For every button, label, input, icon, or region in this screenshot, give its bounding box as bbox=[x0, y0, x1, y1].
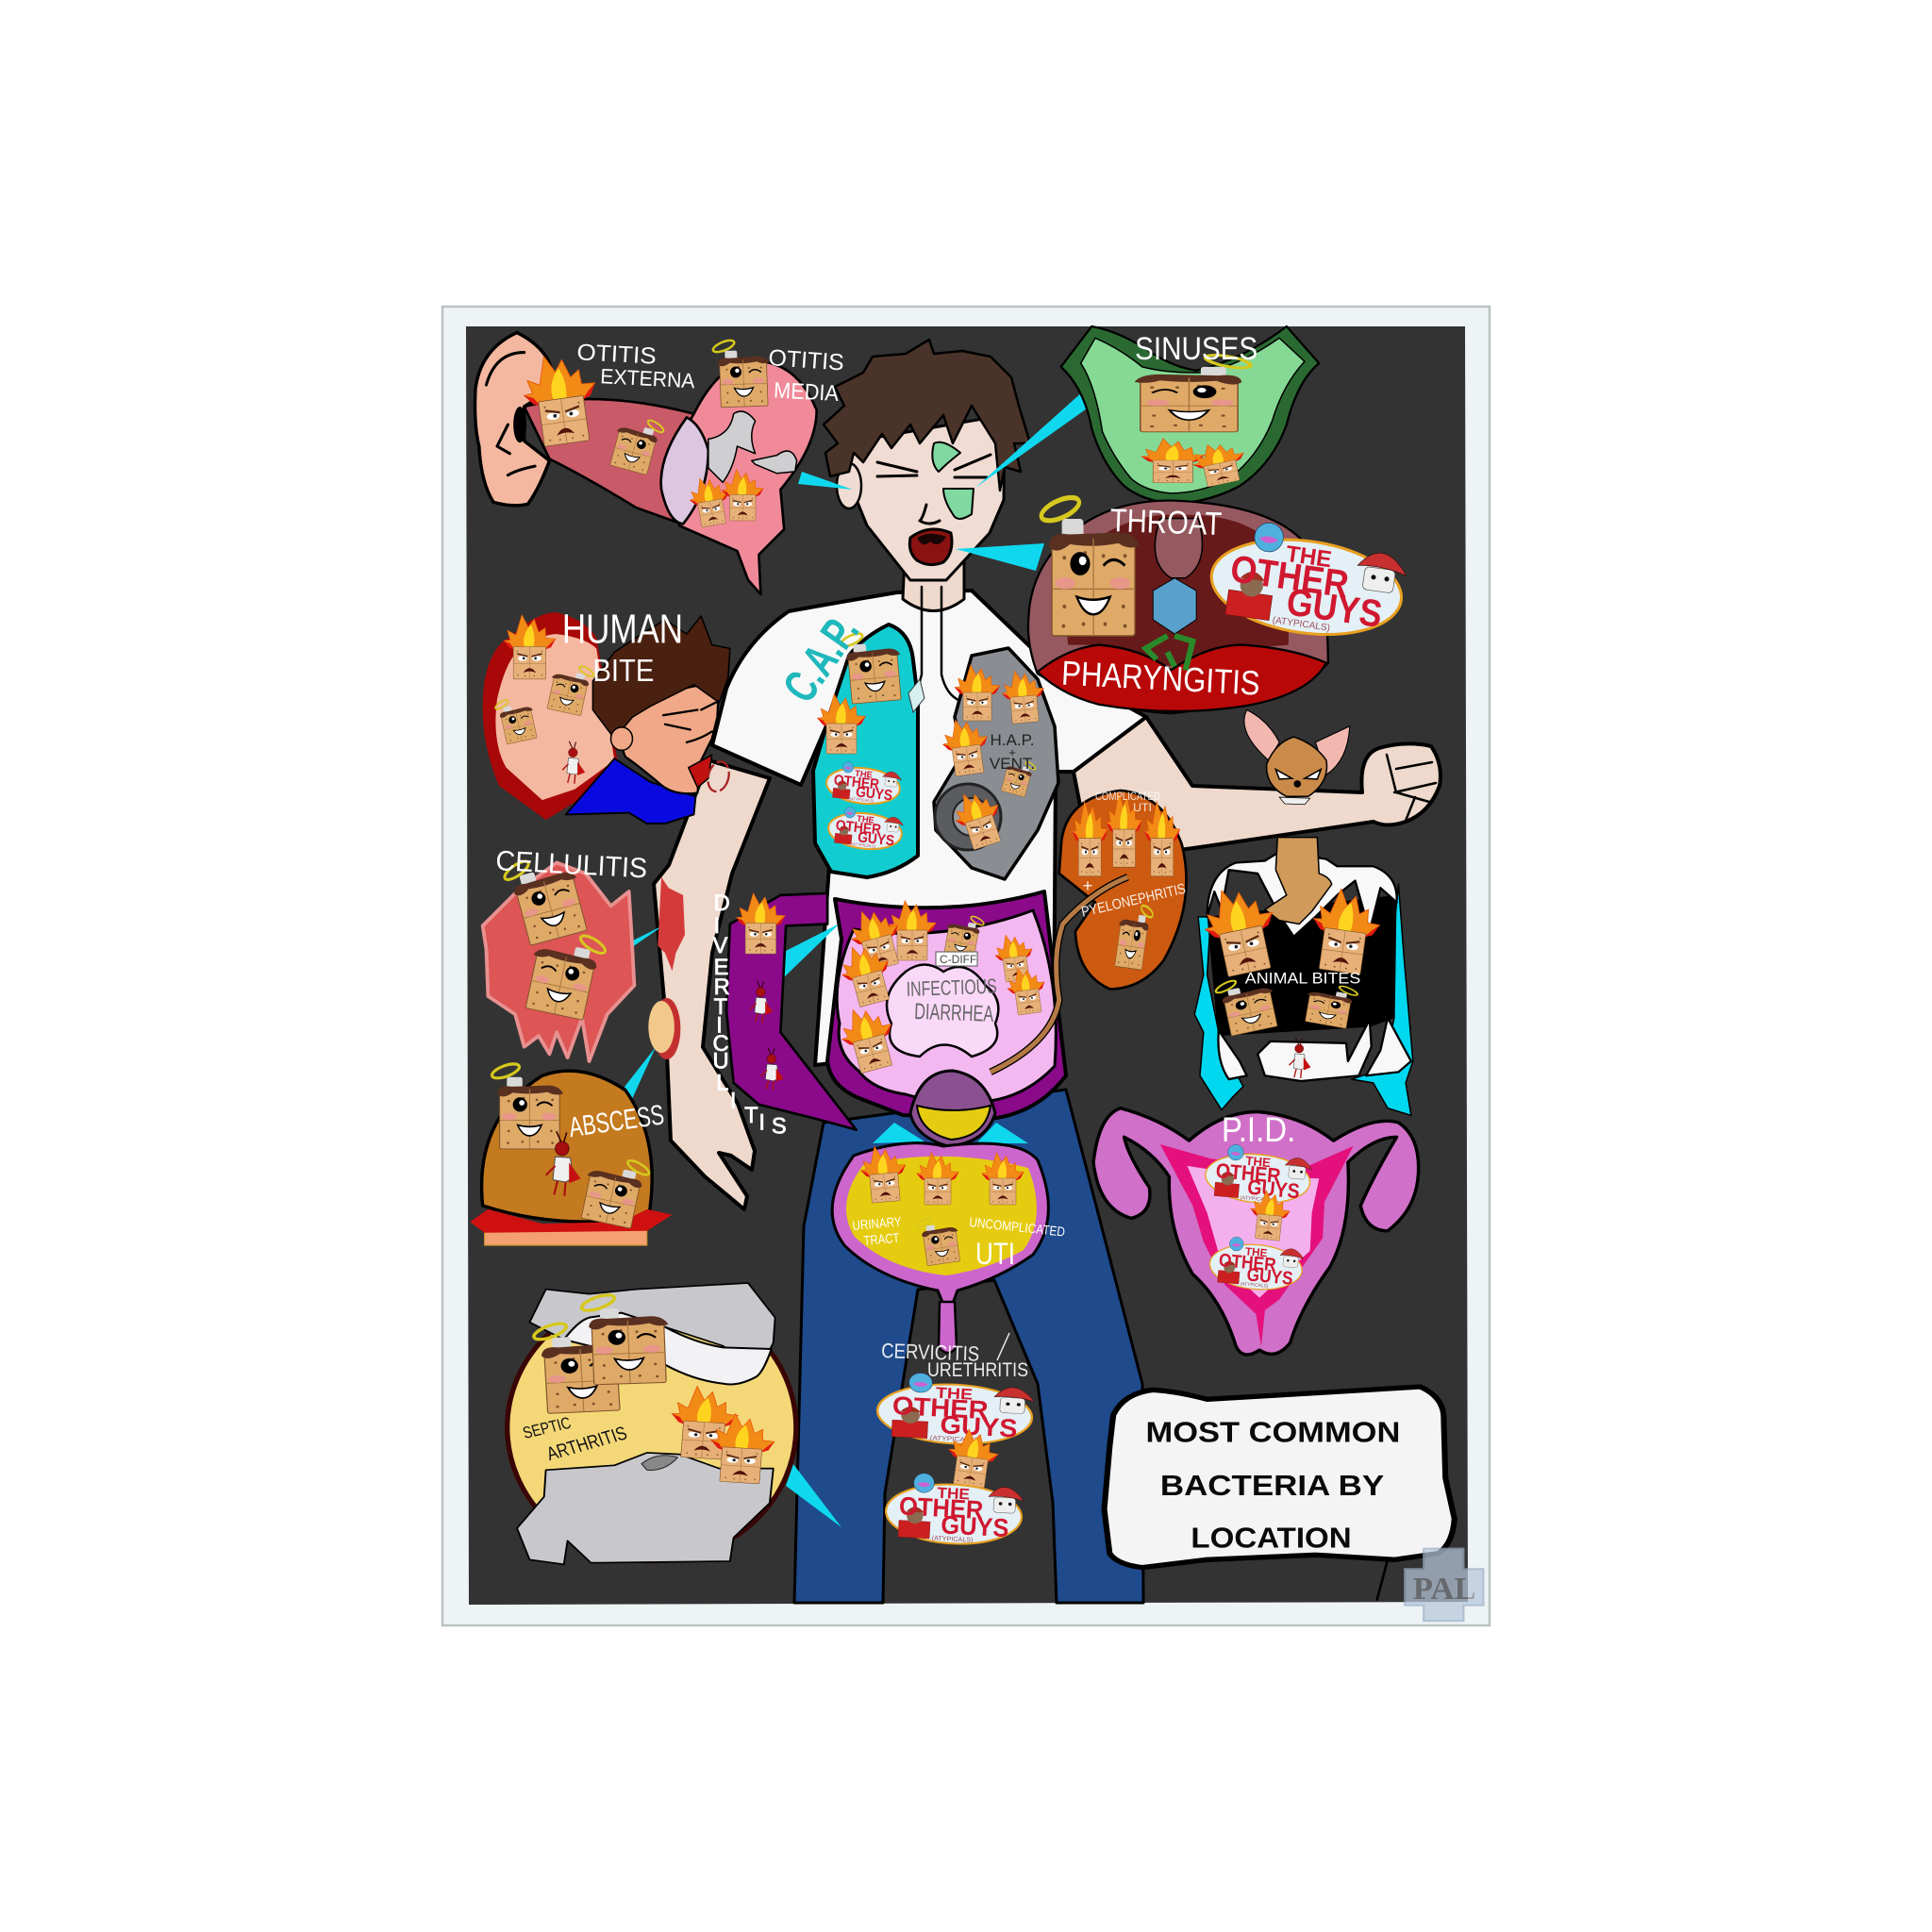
cracker bbox=[916, 1213, 962, 1267]
title text: MOST COMMON bbox=[1146, 1415, 1400, 1448]
label: UTI: UTI bbox=[975, 1237, 1015, 1271]
sinus outline bbox=[1061, 326, 1319, 504]
lung bbox=[813, 625, 918, 877]
dark poster panel bbox=[466, 326, 1468, 1605]
badge: other guys: THE bbox=[855, 769, 873, 780]
badge: other guys: OTHER bbox=[835, 818, 882, 839]
flame cracker bbox=[992, 932, 1037, 983]
bronchus bbox=[908, 679, 924, 712]
ant bbox=[761, 1047, 784, 1090]
eardrum bbox=[661, 417, 708, 524]
dog nose bbox=[1293, 780, 1301, 788]
wound bbox=[483, 612, 618, 820]
label: human bite bbox=[562, 607, 683, 689]
label: sinuses: SINUSES bbox=[1135, 331, 1257, 367]
flame cracker bbox=[917, 1153, 958, 1205]
dog ear right bbox=[1315, 726, 1350, 774]
flame cracker bbox=[668, 1385, 741, 1460]
bladder urine bbox=[846, 1157, 1037, 1275]
cracker bbox=[1303, 979, 1359, 1029]
label: uncomplicated: UNCOMPLICATED bbox=[969, 1214, 1066, 1240]
label: complicated UTI bbox=[1095, 790, 1160, 814]
cyan pointer beams bbox=[625, 391, 1090, 1527]
label: otitis media: MEDIA bbox=[773, 378, 840, 407]
badge: other guys bbox=[826, 805, 905, 853]
flame cracker bbox=[836, 1001, 902, 1075]
logo: PAL watermark bbox=[1405, 1549, 1483, 1621]
label: infectious diarrhea bbox=[906, 974, 997, 1027]
ear detail bbox=[486, 353, 535, 475]
label: otitis externa bbox=[576, 340, 695, 392]
panel: cellulitis bbox=[483, 845, 685, 1061]
upper bone bbox=[529, 1283, 775, 1368]
eyes and nose bbox=[877, 455, 991, 524]
uterus body and tubes bbox=[1093, 1108, 1419, 1355]
bladder wall bbox=[832, 1143, 1048, 1316]
badge: other guys: THE bbox=[937, 1484, 970, 1503]
upper teeth bbox=[1208, 852, 1397, 937]
kidney bbox=[1059, 791, 1187, 989]
cracker bbox=[531, 1318, 625, 1414]
dog ear left bbox=[1244, 709, 1279, 760]
panel: sinuses bbox=[1061, 326, 1319, 504]
label: cervicitis bbox=[881, 1333, 1028, 1381]
bone crack bbox=[641, 1456, 677, 1470]
flame cracker bbox=[858, 1144, 908, 1204]
C-Diff label: C-DIFF bbox=[940, 953, 976, 966]
flame cracker bbox=[940, 716, 992, 777]
flame cracker bbox=[1005, 965, 1049, 1016]
boil bbox=[648, 998, 680, 1059]
title text: LOCATION bbox=[1191, 1522, 1352, 1554]
trachea lines bbox=[896, 587, 972, 719]
inner lumen bbox=[887, 964, 998, 1057]
pointer: abscess bbox=[625, 1047, 656, 1099]
label: abscess: ABSCESS bbox=[567, 1099, 666, 1143]
ant: bite bbox=[562, 741, 585, 784]
flame cracker bbox=[817, 694, 866, 754]
abscess dome bbox=[482, 1071, 652, 1222]
cracker bbox=[491, 1061, 563, 1149]
badge: other guys bbox=[884, 1472, 1025, 1547]
logo cross bbox=[1405, 1549, 1483, 1621]
virus legs bbox=[1146, 636, 1192, 670]
machine lung bbox=[934, 648, 1058, 879]
bite mark on arm bbox=[705, 759, 732, 794]
label: HAP and vent bbox=[990, 731, 1035, 773]
small bladder dome bbox=[910, 1071, 995, 1146]
right arm with fist bbox=[1074, 717, 1441, 854]
badge: other guys: THE bbox=[857, 814, 874, 825]
middle ear bbox=[665, 361, 817, 594]
label: septic arthritis bbox=[521, 1413, 630, 1465]
panel: cervicitis urethritis bbox=[875, 1333, 1036, 1547]
poster frame bbox=[442, 307, 1490, 1625]
label: HAP and vent: H.A.P. bbox=[991, 731, 1034, 749]
badge: other guys: GUYS bbox=[1246, 1264, 1293, 1290]
cyan saliva right bbox=[1352, 884, 1413, 1115]
pointer: sinuses bbox=[975, 391, 1090, 488]
label: C.A.P.: C.A.P. bbox=[773, 606, 869, 711]
head face bbox=[841, 415, 1005, 580]
diverticulum shape bbox=[726, 893, 857, 1130]
dog eyes bbox=[1275, 770, 1321, 779]
panel: bladder UTI bbox=[832, 1071, 1066, 1353]
label: cervicitis: CERVICITIS bbox=[881, 1339, 980, 1366]
badge: other guys bbox=[1206, 516, 1411, 646]
label: human bite: BITE bbox=[592, 654, 654, 689]
shirt bbox=[712, 591, 1146, 1065]
panel: infectious diarrhea bowels bbox=[827, 891, 1066, 1119]
label: HAP and vent: VENT. bbox=[990, 755, 1035, 773]
outer ear bbox=[475, 333, 554, 506]
endometrium bbox=[1160, 1144, 1354, 1346]
panel: ventilated lung HAP bbox=[934, 648, 1058, 879]
label: pyelonephritis: + bbox=[1083, 875, 1092, 895]
badge: other guys: (ATYPICALS) bbox=[932, 1536, 974, 1544]
dog body bbox=[1265, 838, 1332, 924]
ear canal bbox=[525, 399, 694, 525]
cracker bbox=[1213, 971, 1280, 1038]
ear bbox=[837, 463, 861, 508]
panel: septic arthritis bbox=[508, 1283, 796, 1564]
panel: chihuahua on arm bbox=[1244, 709, 1350, 805]
panel: lung CAP bbox=[773, 606, 924, 877]
badge: other guys: THE bbox=[1245, 1154, 1272, 1170]
ossicles bbox=[708, 411, 797, 482]
badge: other guys: THE bbox=[1244, 1245, 1268, 1259]
ear hole bbox=[513, 407, 526, 442]
label: PID: P.I.D. bbox=[1222, 1109, 1295, 1149]
badge: other guys bbox=[1208, 1235, 1306, 1293]
badge: other guys: OTHER bbox=[1215, 1158, 1281, 1188]
left arm with hand bbox=[654, 760, 770, 1209]
pointer: septic arthritis bbox=[786, 1464, 841, 1527]
cracker bbox=[942, 910, 986, 960]
panel: abscess bbox=[470, 1061, 673, 1245]
label: diverticulitis: DIVERTICULITIS bbox=[712, 891, 787, 1139]
biter mouth bbox=[689, 755, 712, 788]
label: septic arthritis: ARTHRITIS bbox=[543, 1423, 630, 1465]
label: cervicitis: URETHRITIS bbox=[927, 1359, 1028, 1381]
cartilage bbox=[564, 1313, 772, 1384]
throat inner bbox=[1067, 515, 1289, 667]
title text bbox=[1146, 1415, 1400, 1554]
fan bbox=[935, 784, 1001, 850]
label: infectious diarrhea: DIARRHEA bbox=[914, 999, 994, 1027]
flame cracker bbox=[736, 893, 785, 954]
hair bbox=[824, 340, 1030, 491]
badge: other guys: (ATYPICALS) bbox=[1240, 1195, 1272, 1204]
panel: PID uterus bbox=[1093, 1108, 1419, 1355]
cyan saliva left bbox=[1194, 917, 1243, 1110]
pointer: cellulitis bbox=[629, 924, 665, 947]
title speech bubble bbox=[1105, 1387, 1455, 1601]
flame cracker bbox=[982, 1153, 1024, 1205]
label: infectious diarrhea: INFECTIOUS bbox=[906, 974, 997, 1001]
ureter fill bbox=[991, 877, 1127, 1072]
flame cracker bbox=[1141, 439, 1205, 483]
label: urinary tract bbox=[852, 1213, 903, 1248]
pointer: diverticulitis bbox=[782, 924, 840, 979]
neck bbox=[903, 557, 964, 611]
skin base bbox=[485, 1229, 647, 1245]
flame cracker bbox=[836, 940, 898, 1009]
label: pyelonephritis: PYELONEPHRITIS bbox=[1080, 881, 1187, 921]
ant bbox=[1289, 1038, 1310, 1078]
flame cracker bbox=[708, 1412, 776, 1485]
pointer: throat bbox=[956, 543, 1044, 571]
biter face lines bbox=[663, 701, 719, 742]
dog head bbox=[1267, 737, 1326, 796]
badge: other guys: OTHER bbox=[833, 773, 880, 793]
badge text: THE bbox=[1284, 541, 1333, 573]
biter shirt bbox=[566, 758, 695, 824]
panel: throat pharyngitis bbox=[1028, 492, 1411, 713]
label: human bite: HUMAN bbox=[562, 607, 683, 653]
label: urinary tract: URINARY bbox=[852, 1213, 903, 1233]
label: HAP and vent: + bbox=[1008, 745, 1016, 759]
cracker bbox=[500, 846, 591, 948]
flame cracker bbox=[1190, 438, 1249, 489]
bubble bbox=[1105, 1387, 1455, 1568]
cracker bbox=[1039, 492, 1140, 636]
badge: other guys: (ATYPICALS) bbox=[849, 796, 874, 804]
label: pharyngitis: PHARYNGITIS bbox=[1060, 654, 1261, 703]
badge text: OTHER bbox=[1228, 546, 1351, 606]
mascots bbox=[1225, 519, 1411, 639]
lower front teeth bbox=[1257, 1020, 1372, 1081]
label: complicated UTI: UTI bbox=[1133, 801, 1152, 814]
badge: other guys bbox=[875, 1371, 1036, 1448]
cracker: media bbox=[711, 337, 771, 408]
flame cracker: media 1 bbox=[686, 474, 733, 528]
flame cracker: media 2 bbox=[722, 469, 763, 521]
label: otitis media: OTITIS bbox=[768, 345, 845, 376]
cracker: canal bbox=[608, 410, 667, 476]
mouth bbox=[909, 529, 952, 565]
label: complicated UTI: COMPLICATED bbox=[1095, 790, 1160, 803]
ant bbox=[546, 1131, 580, 1196]
flame cracker bbox=[845, 904, 908, 974]
bladder pointers bbox=[873, 1123, 1028, 1143]
cracker bbox=[523, 924, 609, 1022]
badge: other guys: GUYS bbox=[941, 1510, 1009, 1542]
cracker flame: bite bbox=[504, 615, 556, 679]
flame cracker: external bbox=[519, 350, 603, 448]
biter hair bbox=[592, 616, 730, 739]
panel: human bite bbox=[483, 607, 732, 824]
blood base bbox=[470, 1209, 673, 1233]
label: urinary tract: TRACT bbox=[863, 1230, 900, 1248]
mouth interior bbox=[1208, 895, 1397, 1036]
cracker bbox=[839, 627, 904, 705]
badge: other guys bbox=[824, 759, 903, 808]
label: animal bites: ANIMAL BITES bbox=[1245, 970, 1360, 988]
biter head bbox=[614, 681, 719, 793]
sinus cavity bbox=[1081, 338, 1305, 493]
flame cracker bbox=[1248, 1189, 1291, 1241]
badge: other guys bbox=[1204, 1142, 1314, 1208]
logo text: PAL bbox=[1413, 1571, 1476, 1606]
flame cracker bbox=[955, 665, 1000, 721]
lower left tooth bbox=[1218, 1030, 1247, 1079]
badge: other guys: (ATYPICALS) bbox=[1272, 615, 1331, 634]
cracker bbox=[578, 1150, 653, 1230]
fan hub bbox=[953, 798, 991, 836]
uterine cavity bbox=[1188, 1166, 1319, 1298]
flame cracker bbox=[1198, 881, 1284, 979]
panel: animal bites bbox=[1194, 838, 1413, 1115]
label: cellulitis: CELLULITIS bbox=[495, 845, 648, 884]
lower right tooth bbox=[1366, 1018, 1411, 1075]
label: septic arthritis: SEPTIC bbox=[521, 1413, 573, 1442]
skin infection blob bbox=[483, 862, 634, 1061]
wound skin bbox=[495, 634, 614, 800]
label: otitis externa: EXTERNA bbox=[600, 364, 695, 392]
mouth teeth shadow bbox=[917, 534, 946, 544]
badge: other guys: GUYS bbox=[1246, 1175, 1301, 1203]
panel: diverticulitis bbox=[712, 891, 857, 1139]
badge: other guys: GUYS bbox=[857, 829, 895, 849]
badge text bbox=[1224, 534, 1391, 636]
flame cracker bbox=[1072, 801, 1108, 876]
jeans bbox=[794, 1090, 1143, 1603]
pointer: ear bbox=[798, 472, 853, 490]
badge: other guys: THE bbox=[935, 1384, 974, 1403]
arm wound bbox=[658, 877, 685, 971]
badge: other guys: OTHER bbox=[1218, 1250, 1277, 1275]
throat outer bbox=[1028, 500, 1328, 713]
cracker 2: bite bbox=[493, 693, 539, 745]
flame cracker bbox=[1144, 801, 1180, 876]
badge: other guys: (ATYPICALS) bbox=[851, 841, 876, 849]
cracker 1: bite bbox=[545, 659, 596, 717]
lower bone bbox=[517, 1453, 774, 1564]
dog teeth bbox=[1279, 797, 1310, 805]
joint capsule bbox=[508, 1294, 796, 1561]
badge text: GUYS bbox=[1284, 579, 1385, 636]
flame cracker bbox=[1307, 886, 1384, 976]
cracker bbox=[1113, 900, 1155, 971]
title text: BACTERIA BY bbox=[1160, 1469, 1384, 1501]
flame cracker bbox=[1107, 792, 1142, 867]
badge: other guys: GUYS bbox=[940, 1411, 1018, 1443]
biter ear bbox=[611, 727, 632, 750]
virus head bbox=[1153, 578, 1196, 634]
badge: other guys: OTHER bbox=[891, 1391, 989, 1425]
badge: other guys: GUYS bbox=[855, 784, 893, 804]
panel: ear otitis externa and media bbox=[475, 333, 845, 594]
cracker bbox=[1135, 353, 1253, 432]
badge: other guys: (ATYPICALS) bbox=[930, 1434, 977, 1444]
label: otitis media bbox=[768, 345, 845, 407]
bubble tail bbox=[1376, 1559, 1388, 1601]
intestine lining bbox=[837, 910, 1056, 1103]
uvula bbox=[1155, 519, 1203, 578]
flame cracker bbox=[948, 785, 1008, 853]
flame cracker bbox=[944, 1426, 1001, 1490]
sinus highlight on face bbox=[932, 442, 974, 519]
tongue bbox=[1038, 645, 1326, 711]
panel: kidney pyelonephritis bbox=[991, 790, 1187, 1072]
urethra bbox=[939, 1302, 957, 1353]
badge: other guys: (ATYPICALS) bbox=[1241, 1281, 1269, 1290]
small bladder urine bbox=[917, 1106, 991, 1140]
ant bbox=[750, 981, 773, 1024]
flame cracker bbox=[888, 901, 937, 960]
fist lines bbox=[1387, 755, 1436, 821]
label: throat: THROAT bbox=[1109, 503, 1223, 542]
cracker bbox=[1000, 756, 1038, 798]
badge: other guys: OTHER bbox=[898, 1491, 984, 1524]
label: otitis externa: OTITIS bbox=[576, 340, 657, 370]
flame cracker bbox=[1000, 669, 1047, 724]
bowel purple wall bbox=[827, 891, 1066, 1119]
figure: patient body bbox=[654, 340, 1441, 1603]
cracker bbox=[579, 1291, 671, 1385]
ureter bbox=[991, 877, 1127, 1072]
